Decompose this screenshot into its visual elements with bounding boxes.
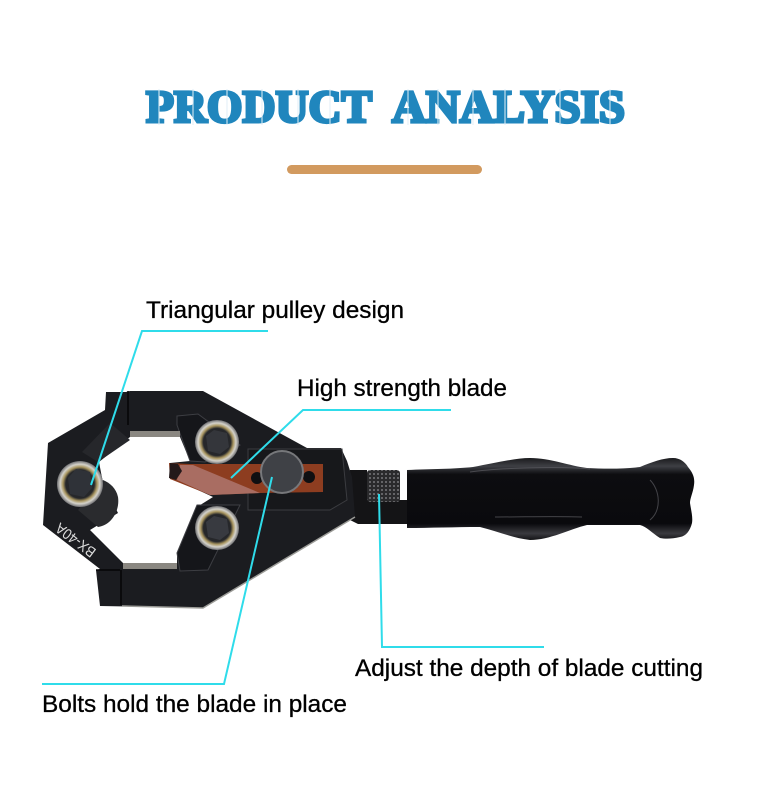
- blade clamp bolt: [261, 451, 303, 493]
- tool: cable stripper: [43, 391, 694, 608]
- neck: [350, 470, 407, 524]
- title: ANALYSIS: [392, 81, 625, 132]
- callout: depth adjust: Adjust the depth of blade cutting: [355, 655, 703, 682]
- title: PRODUCT: [146, 81, 372, 132]
- left arm face: [82, 423, 130, 462]
- bottom pulley arm: [177, 505, 240, 571]
- blade holes: [251, 471, 315, 484]
- knurled adjusting knob: [367, 470, 400, 502]
- blade bevel: [177, 465, 260, 495]
- body lower bevel: [122, 517, 355, 608]
- pulley top: [195, 420, 239, 464]
- callout: depth adjust: [355, 494, 703, 682]
- hinge seams: [96, 391, 128, 605]
- title: [146, 81, 625, 132]
- callout: triangular pulley: [91, 297, 404, 485]
- pulley left: [57, 461, 103, 507]
- callout: blade: High strength blade: [297, 375, 507, 402]
- blade carrier: [248, 449, 347, 510]
- handle: [407, 458, 694, 540]
- callout: blade: [231, 375, 507, 478]
- pulley bottom: [195, 506, 239, 550]
- callout: triangular pulley: Triangular pulley design: [146, 297, 404, 324]
- blade: [169, 463, 323, 495]
- top pulley arm: [177, 414, 240, 462]
- handle highlights: [470, 468, 658, 520]
- callout: bolts: [42, 477, 347, 718]
- blade tip: [169, 463, 182, 480]
- tool body: [43, 391, 355, 608]
- callout: bolts: Bolts hold the blade in place: [42, 691, 347, 718]
- top rod: [130, 431, 180, 437]
- title underline bar: [287, 165, 482, 174]
- model marking: BX-40A: [52, 519, 99, 560]
- left pulley arm: [78, 480, 118, 527]
- bottom rod: [123, 563, 177, 569]
